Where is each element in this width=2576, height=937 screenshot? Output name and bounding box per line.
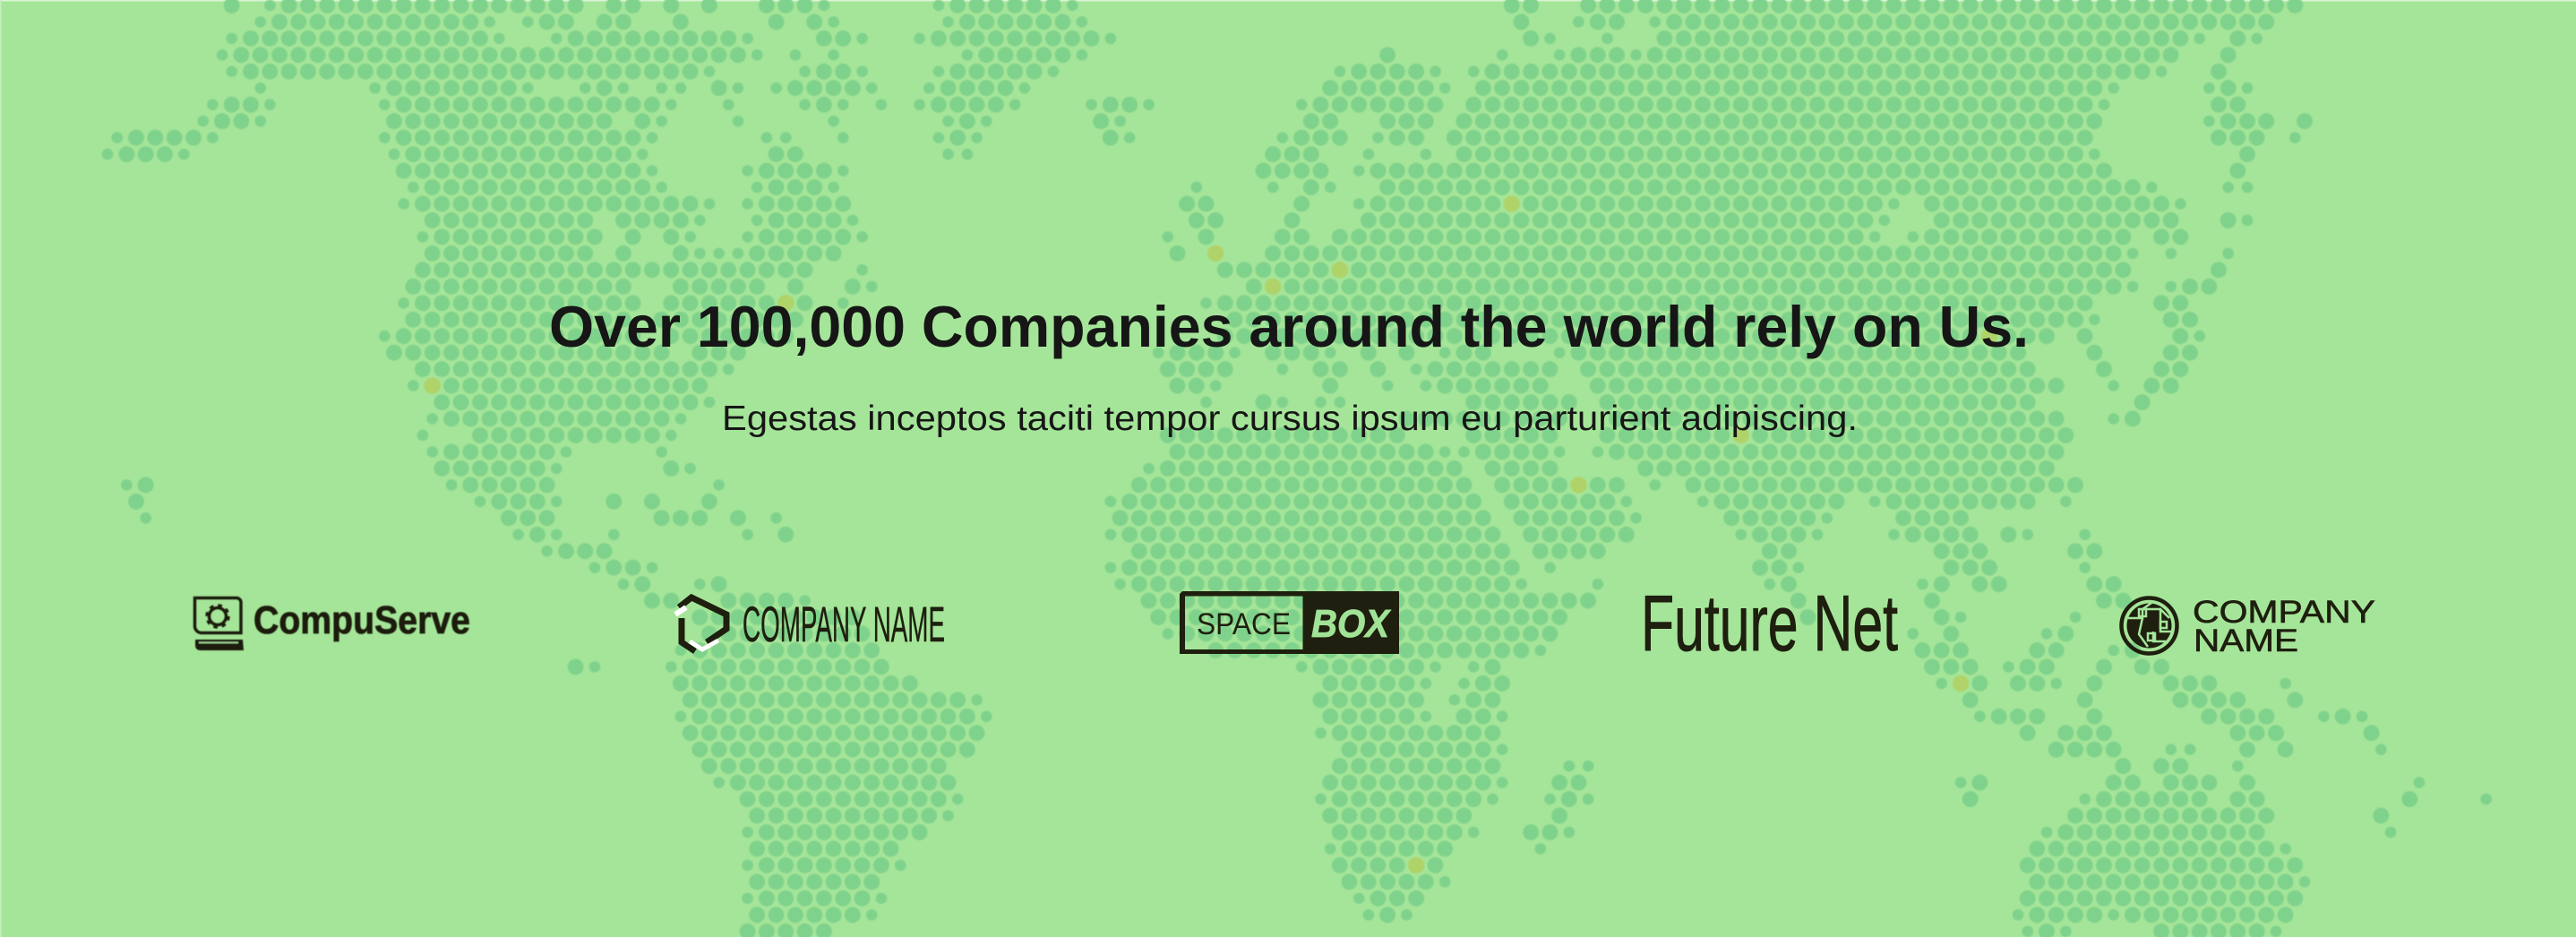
logo: globe Company Name (2121, 595, 2375, 658)
subtitle: Egestas inceptos taciti tempor cursus ipsum eu parturient adipiscing. (722, 400, 1858, 438)
logo: Space Box: BOX (1311, 602, 1391, 646)
logo: Future Net: Future Net (1641, 579, 1898, 667)
icon: computer with gear (195, 598, 244, 650)
icon: broken hexagon (675, 597, 726, 651)
logo: CompuServe: CompuServe (253, 598, 470, 642)
panel: world map banner: COMPANY NAME (743, 596, 945, 652)
logo: CompuServe (195, 598, 470, 650)
icon: circuit globe (2121, 598, 2177, 654)
logo: hexagon Company Name (675, 596, 945, 652)
logo: globe Company Name: NAME (2194, 623, 2298, 658)
logo: Space Box (1180, 591, 1399, 654)
logo: Space Box: SPACE (1197, 607, 1291, 641)
title: Over 100,000 Companies around the world rely on Us. (549, 294, 2029, 359)
logo: globe Company Name: COMPANY (2193, 595, 2375, 630)
